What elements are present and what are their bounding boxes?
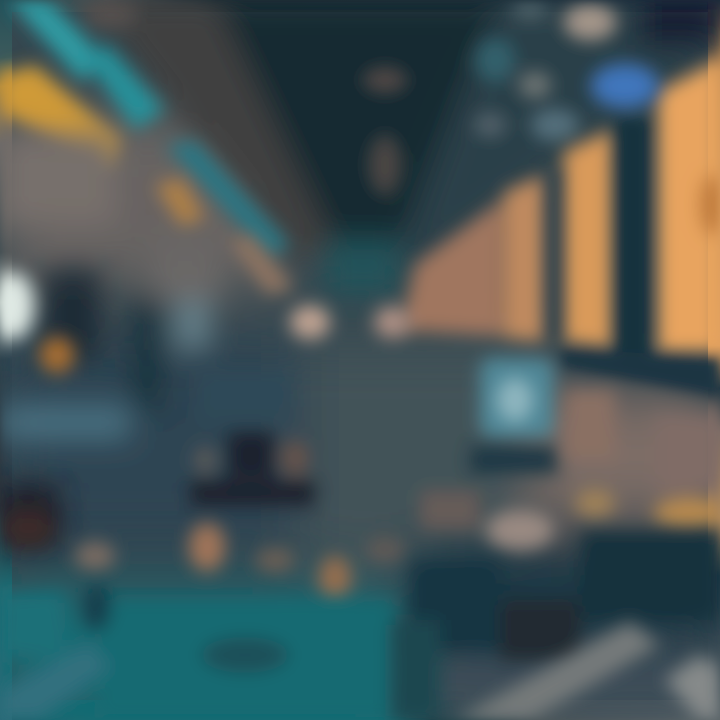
right lower wall panels xyxy=(420,390,720,550)
right orange windows xyxy=(400,60,720,352)
blue ceiling lamp xyxy=(591,64,659,108)
grey diagonal floor stripes xyxy=(455,622,720,720)
orange window highlight xyxy=(700,175,720,235)
glowing corridor lights xyxy=(290,305,410,339)
left yellow signs xyxy=(0,65,295,295)
central crowd silhouettes xyxy=(190,372,315,506)
left teal light strip xyxy=(8,0,290,258)
lower orange highlights xyxy=(2,508,405,600)
blue lit screen xyxy=(470,358,558,474)
dark ceiling xyxy=(90,0,720,295)
dark pillars xyxy=(546,118,720,398)
left wall details xyxy=(0,135,220,545)
ceiling light spots xyxy=(82,1,616,195)
left bright window xyxy=(0,272,74,373)
dark lower right furniture xyxy=(392,530,720,720)
teal floor xyxy=(0,583,395,720)
